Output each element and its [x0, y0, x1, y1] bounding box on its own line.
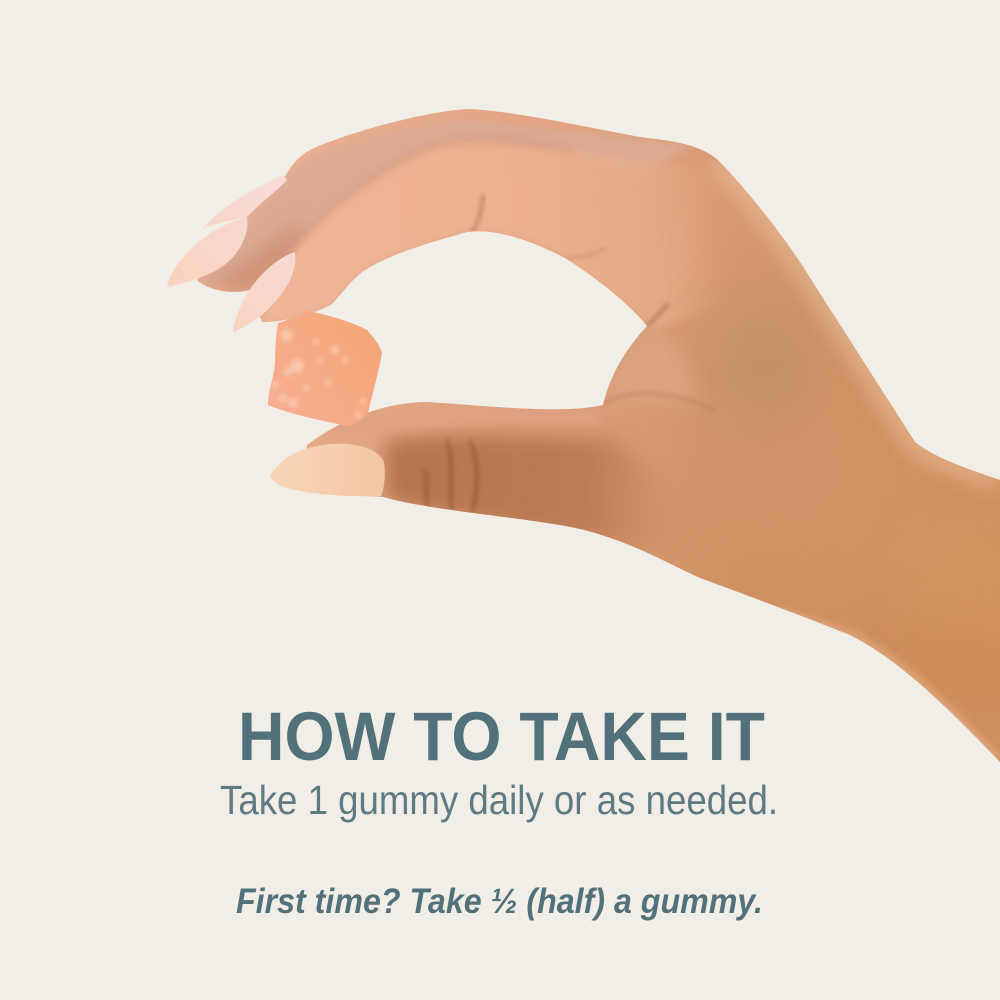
index fingernail — [233, 252, 295, 333]
middle finger tone — [197, 120, 690, 290]
middle finger shade — [212, 220, 304, 292]
first time note: First time? Take ½ (half) a gummy. — [236, 882, 763, 921]
gummy — [268, 312, 382, 426]
lower wrist rim — [775, 612, 1000, 762]
thumb top light — [329, 406, 598, 430]
thumb knuckle creases — [425, 440, 477, 512]
thumb shadow — [385, 434, 700, 552]
thumbnail — [270, 444, 385, 496]
forearm tone — [910, 520, 1000, 660]
title: HOW TO TAKE IT — [238, 698, 765, 775]
hand back tone — [700, 299, 814, 414]
knuckle crease — [472, 195, 483, 232]
hand centre tone — [695, 410, 865, 530]
hand silhouette — [197, 109, 1000, 762]
palm crease — [604, 393, 715, 410]
subtitle: Take 1 gummy daily or as needed. — [220, 777, 778, 823]
skin shading — [197, 120, 1000, 762]
web of thumb — [614, 334, 698, 404]
hand illustration — [167, 109, 1000, 762]
gummy body — [268, 312, 382, 426]
sugar specks — [272, 329, 366, 418]
back edge rim light — [718, 160, 1000, 480]
middle fingernail — [167, 217, 247, 287]
web crease — [647, 303, 668, 326]
wrist band — [720, 560, 1000, 690]
index finger edge shadow — [296, 137, 558, 246]
back nail — [203, 175, 287, 228]
index finger — [270, 144, 700, 328]
index base crease — [567, 248, 605, 258]
